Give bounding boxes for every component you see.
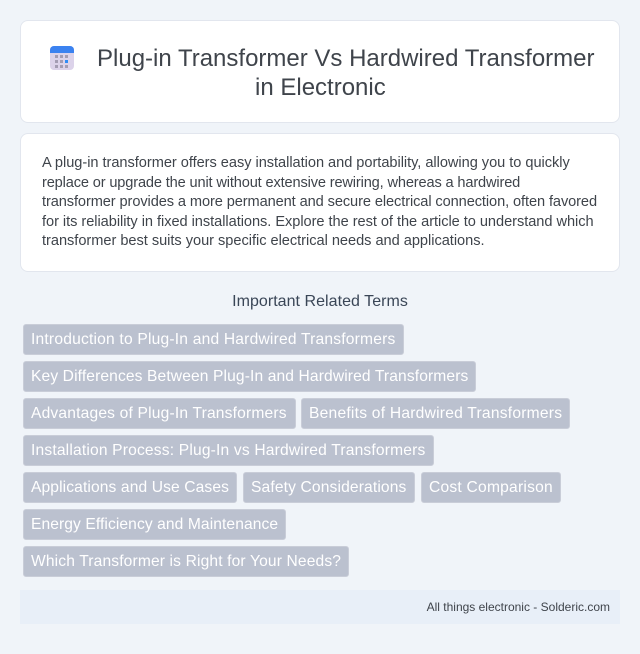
intro text card <box>20 133 620 272</box>
icon: calendar <box>50 46 74 70</box>
tag: Energy Efficiency and Maintenance <box>31 516 278 533</box>
tag: Safety Considerations <box>251 479 406 496</box>
related terms tags <box>23 324 570 577</box>
intro paragraph <box>42 155 597 249</box>
title: Plug-in Transformer Vs Hardwired Transformer <box>97 45 594 72</box>
intro paragraph: for its reliability in fixed installations. Explore the rest of the article to understand which <box>42 214 594 230</box>
tag <box>23 472 237 503</box>
related terms heading: Important Related Terms <box>232 293 408 310</box>
intro paragraph: replace or upgrade the unit without extensive rewiring, whereas a hardwired <box>42 175 520 191</box>
tag <box>421 472 561 503</box>
title card <box>20 20 620 123</box>
tag: Applications and Use Cases <box>31 479 229 496</box>
tag: Which Transformer is Right for Your Needs? <box>31 553 341 570</box>
tag: Introduction to Plug-In and Hardwired Transformers <box>31 331 396 348</box>
tag <box>23 435 434 466</box>
tag <box>301 398 570 429</box>
intro paragraph: transformer provides a more permanent and secure electrical connection, often favored <box>42 194 597 210</box>
tag <box>23 324 404 355</box>
tag <box>23 509 286 540</box>
title: in Electronic <box>255 74 386 101</box>
footer text: All things electronic - Solderic.com <box>427 600 610 614</box>
title <box>97 45 594 101</box>
tag: Key Differences Between Plug-In and Hardwired Transformers <box>31 368 468 385</box>
tag: Advantages of Plug-In Transformers <box>31 405 287 422</box>
footer <box>20 590 620 624</box>
tag: Benefits of Hardwired Transformers <box>309 405 562 422</box>
tag <box>23 361 476 392</box>
intro paragraph: transformer best suits your specific electrical needs and applications. <box>42 233 485 249</box>
tag: Cost Comparison <box>429 479 553 496</box>
intro paragraph: A plug-in transformer offers easy installation and portability, allowing you to quickly <box>42 155 570 171</box>
tag <box>23 546 349 577</box>
tag <box>243 472 415 503</box>
tag: Installation Process: Plug-In vs Hardwired Transformers <box>31 442 425 459</box>
tag <box>23 398 296 429</box>
